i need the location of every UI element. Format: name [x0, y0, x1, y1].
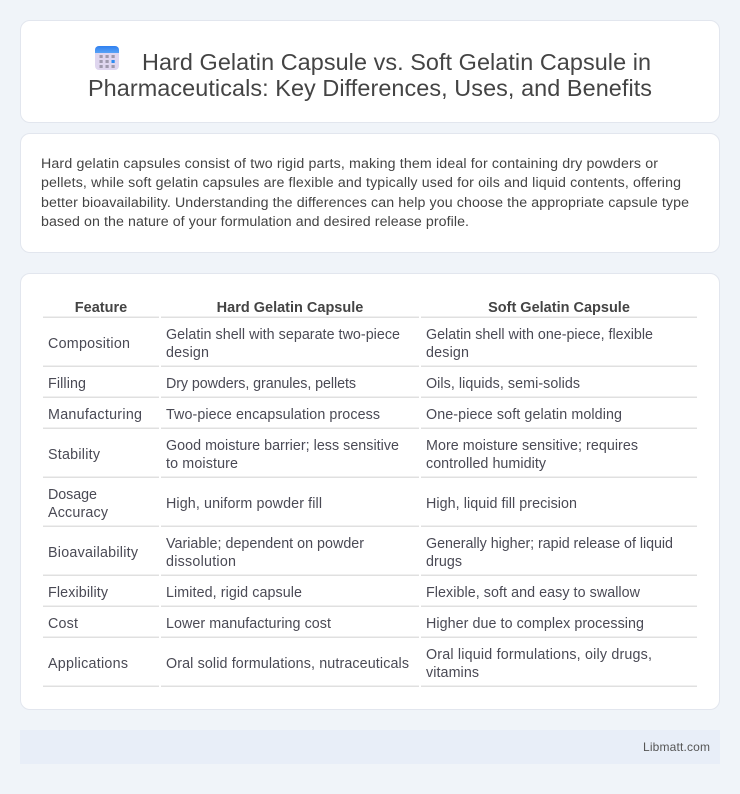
row: bioavailability: dissolution	[166, 554, 236, 570]
row: cost: Higher due to complex processing	[426, 616, 644, 632]
row: stability	[48, 438, 638, 472]
row: applications: Oral solid formulations, nutraceuticals	[166, 656, 409, 672]
comparison table	[43, 300, 697, 686]
title: Pharmaceuticals: Key Differences, Uses, and Benefits	[88, 75, 652, 101]
row: flexibility: Limited, rigid capsule	[166, 585, 302, 601]
row: applications: vitamins	[426, 665, 479, 681]
row: stability: to moisture	[166, 456, 238, 472]
row: bioavailability	[48, 536, 673, 570]
row: composition: Composition	[48, 336, 130, 352]
intro text: based on the nature of your formulation and desired release profile.	[41, 214, 469, 230]
footer bar	[20, 730, 720, 764]
row: applications	[48, 647, 652, 681]
row: dosage accuracy: Accuracy	[48, 505, 109, 521]
row: composition: Gelatin shell with separate two-piece	[166, 327, 400, 343]
row: dosage accuracy: High, uniform powder fill	[166, 496, 322, 512]
row: manufacturing	[48, 407, 622, 423]
row: composition: Gelatin shell with one-piece, flexible	[426, 327, 653, 343]
row: bioavailability: Generally higher; rapid release of liquid	[426, 536, 673, 552]
table header: Feature	[75, 300, 127, 316]
table header	[75, 300, 630, 316]
row: dosage accuracy: High, liquid fill precision	[426, 496, 577, 512]
table rules	[43, 317, 697, 686]
row: bioavailability: Variable; dependent on powder	[166, 536, 364, 552]
row: dosage accuracy: Dosage	[48, 487, 97, 503]
row: stability: controlled humidity	[426, 456, 547, 472]
row: flexibility	[48, 585, 641, 601]
row: filling	[48, 376, 580, 392]
title: Hard Gelatin Capsule vs. Soft Gelatin Capsule in	[142, 49, 651, 75]
row: filling: Oils, liquids, semi-solids	[426, 376, 580, 392]
row: cost	[48, 616, 644, 632]
title	[88, 49, 652, 101]
row: composition: design	[426, 345, 469, 361]
row: cost: Cost	[48, 616, 78, 632]
row: composition	[48, 327, 653, 361]
row: flexibility: Flexibility	[48, 585, 109, 601]
row: flexibility: Flexible, soft and easy to swallow	[426, 585, 641, 601]
row: stability: More moisture sensitive; requires	[426, 438, 638, 454]
row: stability: Stability	[48, 447, 101, 463]
footer credit: Libmatt.com	[643, 740, 710, 754]
row: bioavailability: drugs	[426, 554, 462, 570]
row: manufacturing: One-piece soft gelatin molding	[426, 407, 622, 423]
row: applications: Oral liquid formulations, oily drugs,	[426, 647, 652, 663]
intro text: Hard gelatin capsules consist of two rigid parts, making them ideal for containing dry powders or	[41, 156, 658, 172]
icon: calendar	[95, 46, 119, 70]
row: filling: Filling	[48, 376, 86, 392]
panel: intro card	[20, 133, 720, 253]
row: filling: Dry powders, granules, pellets	[166, 376, 356, 392]
row: dosage accuracy	[48, 487, 577, 521]
row: cost: Lower manufacturing cost	[166, 616, 331, 632]
intro text	[41, 156, 689, 230]
table header: Soft Gelatin Capsule	[488, 300, 630, 316]
row: stability: Good moisture barrier; less sensitive	[166, 438, 399, 454]
row: applications: Applications	[48, 656, 128, 672]
row: manufacturing: Manufacturing	[48, 407, 142, 423]
row: composition: design	[166, 345, 209, 361]
row: manufacturing: Two-piece encapsulation process	[166, 407, 380, 423]
row: bioavailability: Bioavailability	[48, 545, 139, 561]
panel: table card	[20, 273, 720, 710]
panel: title card	[20, 20, 720, 123]
intro text: pellets, while soft gelatin capsules are flexible and typically used for oils and liquid contents, offering	[41, 175, 681, 191]
table header: Hard Gelatin Capsule	[217, 300, 363, 316]
intro text: better bioavailability. Understanding the differences can help you choose the appropriate capsule type	[41, 195, 689, 211]
